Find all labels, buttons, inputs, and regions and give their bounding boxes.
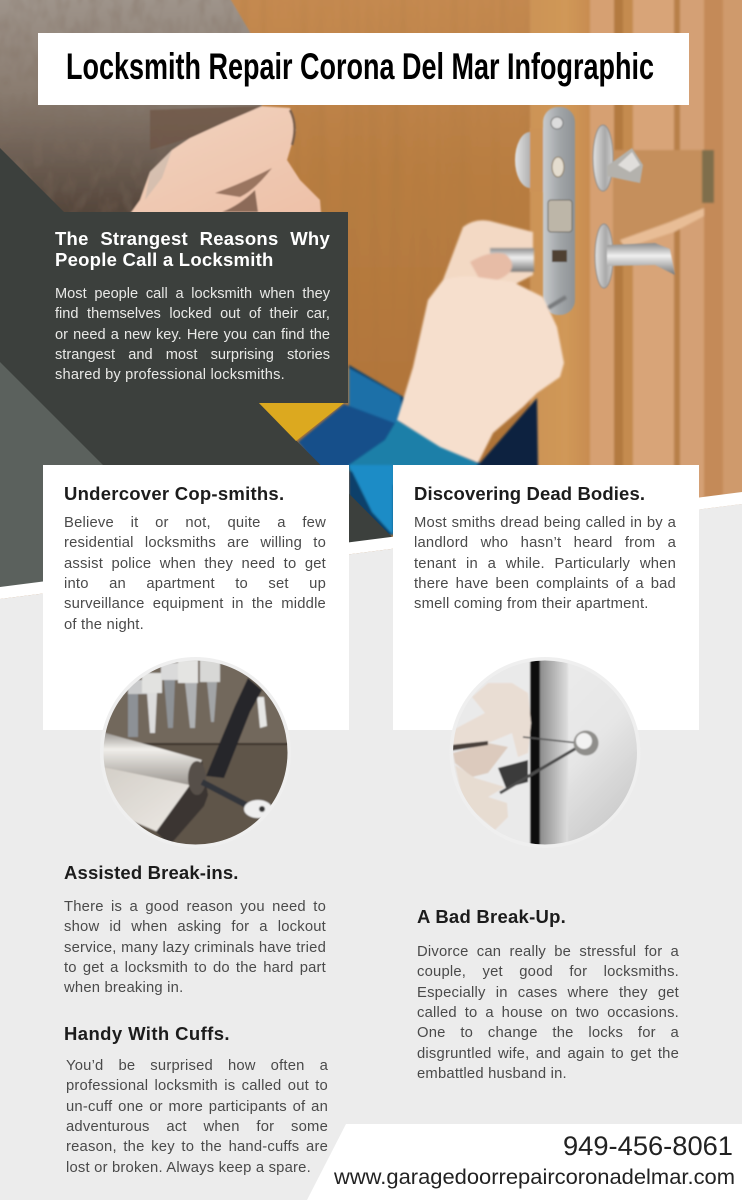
intro heading: The Strangest Reasons Why bbox=[55, 228, 330, 249]
text: handy with cuffs: un-cuff one or more participants of an bbox=[66, 1099, 328, 1115]
photo: gloved hands picking a door lock bbox=[452, 657, 638, 844]
panel: discovering dead bodies bbox=[393, 465, 699, 730]
text: assisted break-ins: when breaking in. bbox=[64, 980, 183, 996]
intro text: or need a new key. Here you can find the bbox=[55, 327, 330, 343]
text: handy with cuffs: lost or broken. Always keep a spare. bbox=[66, 1160, 311, 1176]
heading: handy with cuffs: Handy With Cuffs. bbox=[64, 1023, 230, 1044]
intro text: find themselves locked out of their car, bbox=[55, 306, 330, 322]
heading: undercover cop-smiths: Undercover Cop-smiths. bbox=[64, 483, 284, 504]
text: assisted break-ins: to get a locksmith to do the hard part bbox=[64, 960, 326, 976]
hand bbox=[397, 220, 566, 463]
grey lower background bbox=[0, 504, 742, 1200]
text: a bad break-up: Divorce can really be stressful for a bbox=[417, 944, 679, 960]
title banner bbox=[38, 33, 689, 105]
text: undercover cop-smiths: of the night. bbox=[64, 617, 144, 633]
yellow vest corner bbox=[259, 403, 344, 441]
hero photo: locksmith picking a door lock bbox=[0, 0, 742, 599]
intro text: shared by professional locksmiths. bbox=[55, 367, 285, 383]
text: a bad break-up bbox=[417, 944, 679, 1082]
phone number: 949-456-8061 bbox=[563, 1131, 733, 1161]
arm and blue sleeve bbox=[298, 365, 538, 545]
intro text: Most people call a locksmith when they bbox=[55, 286, 330, 302]
text: discovering dead bodies bbox=[414, 515, 676, 612]
text: a bad break-up: called to a house on two occasions. bbox=[417, 1005, 679, 1021]
text: assisted break-ins: There is a good reason you need to bbox=[64, 899, 326, 915]
text: undercover cop-smiths: assist police when they need to get bbox=[64, 556, 326, 572]
text: discovering dead bodies: smell coming from their apartment. bbox=[414, 596, 649, 612]
text: undercover cop-smiths: into an apartment to set up bbox=[64, 576, 326, 592]
text: handy with cuffs: reason, the key to the hand-cuffs are bbox=[66, 1139, 328, 1155]
text: undercover cop-smiths: Believe it or not, quite a few bbox=[64, 515, 326, 531]
text: a bad break-up: couple, yet good for locksmiths. bbox=[417, 964, 679, 980]
text: discovering dead bodies: there have been complaints of a bad bbox=[414, 576, 676, 592]
website url: www.garagedoorrepaircoronadelmar.com bbox=[333, 1166, 735, 1189]
white diagonal stripe bbox=[0, 492, 742, 599]
dark angular panel background bbox=[0, 148, 392, 590]
heading: assisted break-ins: Assisted Break-ins. bbox=[64, 862, 239, 883]
text: undercover cop-smiths: surveillance equipment in the middle bbox=[64, 596, 326, 612]
text: assisted break-ins: service, many lazy criminals have tried bbox=[64, 940, 326, 956]
intro text bbox=[55, 286, 330, 383]
text: handy with cuffs: You’d be surprised how often a bbox=[66, 1058, 328, 1074]
text: discovering dead bodies: Most smiths dread being called in by a bbox=[414, 515, 676, 531]
text: discovering dead bodies: tenant in a while. Particularly when bbox=[414, 556, 676, 572]
head and hair bbox=[0, 0, 322, 225]
text: handy with cuffs: professional locksmith is called out to bbox=[66, 1078, 328, 1094]
text: discovering dead bodies: landlord who hasn’t heard from a bbox=[414, 535, 676, 551]
door lock hardware bbox=[515, 107, 675, 315]
text: a bad break-up: disgruntled wife, and again to get the bbox=[417, 1046, 679, 1062]
text: undercover cop-smiths bbox=[64, 515, 326, 633]
heading: a bad break-up: A Bad Break-Up. bbox=[417, 906, 566, 927]
heading: discovering dead bodies: Discovering Dead Bodies. bbox=[414, 483, 645, 504]
text: assisted break-ins bbox=[64, 899, 326, 996]
text: handy with cuffs bbox=[66, 1058, 328, 1176]
circular photos bbox=[103, 657, 638, 844]
text: assisted break-ins: show id when asking for a lockout bbox=[64, 919, 326, 935]
text: undercover cop-smiths: residential locksmiths are willing to bbox=[64, 535, 326, 551]
text: a bad break-up: embattled husband in. bbox=[417, 1066, 567, 1082]
text: a bad break-up: Especially in cases where they get bbox=[417, 985, 679, 1001]
text: a bad break-up: One to change the locks for a bbox=[417, 1025, 679, 1041]
intro heading: People Call a Locksmith bbox=[55, 248, 274, 270]
text: handy with cuffs: adventurous act when for some bbox=[66, 1119, 328, 1135]
intro heading bbox=[55, 228, 330, 270]
intro text: strangest and most surprising stories bbox=[55, 347, 330, 363]
panel: undercover cop-smiths bbox=[43, 465, 349, 730]
photo: lock cylinder and picks bbox=[103, 657, 288, 844]
